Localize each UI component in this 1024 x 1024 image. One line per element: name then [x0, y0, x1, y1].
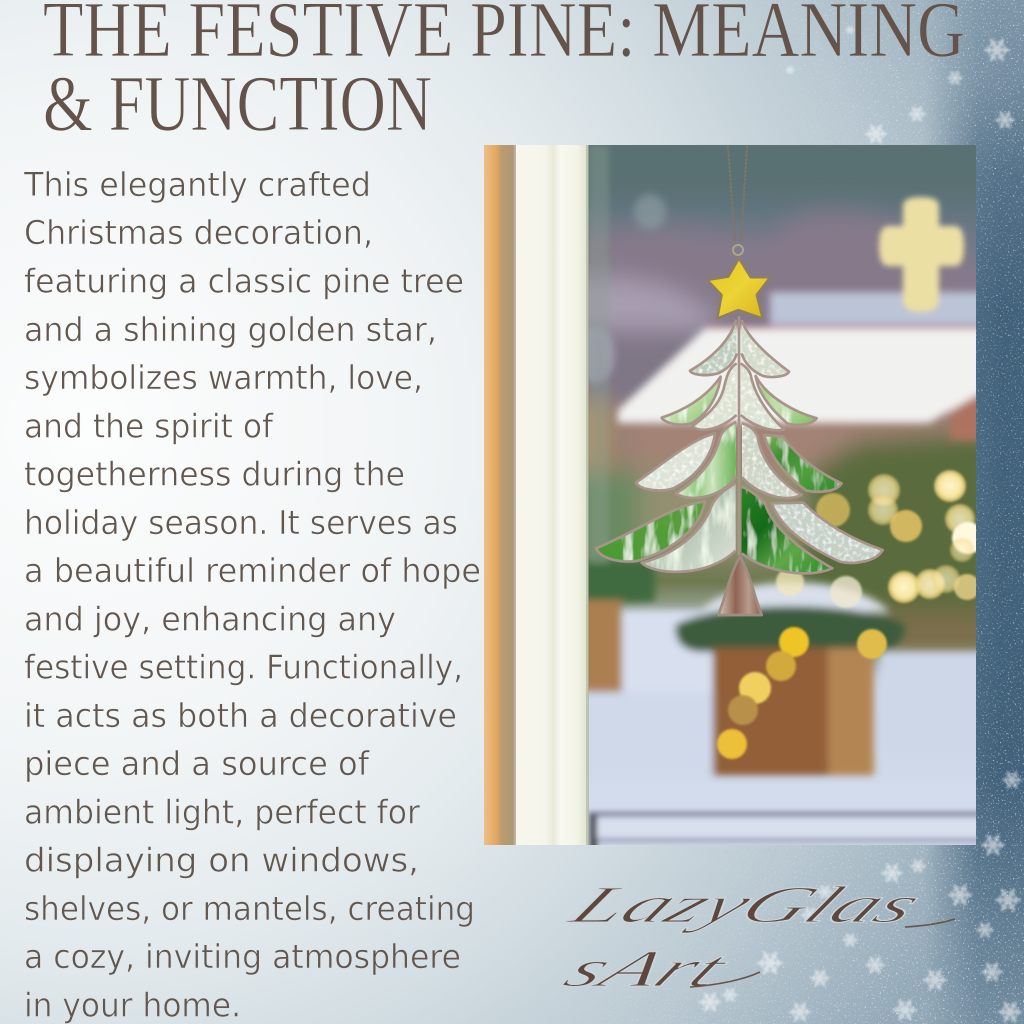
body text: featuring a classic pine tree — [24, 262, 464, 300]
body text: piece and a source of — [24, 745, 371, 783]
body text: ambient light, perfect for — [24, 793, 421, 831]
photo: stained glass ornament in a window — [484, 130, 1000, 860]
body text: in your home. — [24, 986, 241, 1024]
ornament: stained glass pine tree — [596, 258, 883, 615]
icon: tree trunk — [718, 557, 762, 615]
icon: golden star — [707, 258, 770, 318]
body text: displaying on windows, — [24, 842, 419, 880]
signature: LazyGlas — [557, 876, 936, 933]
body text: shelves, or mantels, creating — [24, 890, 475, 928]
body text: symbolizes warmth, love, — [24, 359, 423, 397]
body text: and the spirit of — [24, 407, 274, 445]
body text: it acts as both a decorative — [24, 697, 457, 735]
lead came outlines — [596, 316, 883, 573]
signature: sArt — [552, 940, 744, 997]
body text — [23, 166, 481, 1024]
snowflakes — [700, 26, 1021, 1021]
body text: festive setting. Functionally, — [24, 648, 463, 686]
tree glass panes — [596, 320, 883, 573]
ornament chain — [728, 146, 747, 255]
blurred golden cross — [879, 197, 964, 312]
body text: togetherness during the — [24, 456, 405, 494]
blurred winter scene — [588, 145, 976, 845]
title — [43, 0, 965, 148]
body text: a beautiful reminder of hope — [24, 552, 481, 590]
body text: a cozy, inviting atmosphere — [24, 938, 461, 976]
window frame — [484, 145, 589, 845]
title: & FUNCTION — [43, 61, 432, 148]
bokeh lights — [717, 470, 984, 759]
body text: and joy, enhancing any — [24, 600, 396, 638]
body text: This elegantly crafted — [23, 166, 371, 204]
signature — [552, 876, 955, 997]
body text: and a shining golden star, — [24, 311, 437, 349]
body text: holiday season. It serves as — [24, 504, 458, 542]
body text: Christmas decoration, — [24, 214, 373, 252]
